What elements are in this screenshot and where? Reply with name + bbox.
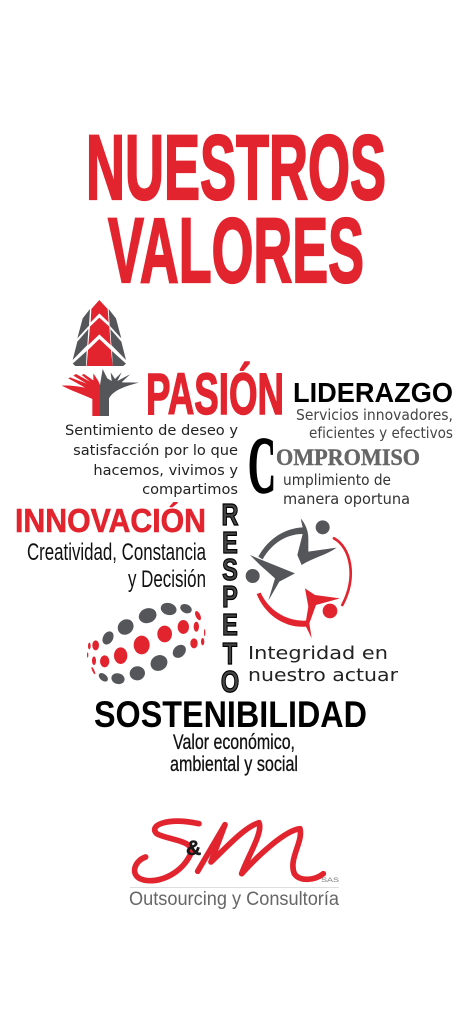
heading: respeto vertical: O xyxy=(221,664,239,699)
heading: compromiso xyxy=(248,422,420,510)
text: respeto description xyxy=(248,643,399,686)
text: pasión description xyxy=(65,422,238,498)
text: pasión description: satisfacción por lo que xyxy=(73,442,238,459)
logo ampersand: & xyxy=(186,837,201,860)
text: pasión description: Sentimiento de deseo y xyxy=(65,422,238,439)
text: respeto description: nuestro actuar xyxy=(248,665,399,686)
text: innovación description: Creatividad, Constancia xyxy=(27,539,206,566)
text: liderazgo description: eficientes y efectivos xyxy=(309,424,453,442)
logo tagline: Outsourcing y Consultoría xyxy=(129,889,339,910)
logo SAS: SAS xyxy=(321,877,340,884)
heading: pasión: PASIÓN xyxy=(146,362,284,427)
logo: S&M xyxy=(129,821,340,910)
text: innovación description xyxy=(27,539,206,593)
heading: respeto vertical: R xyxy=(221,497,239,532)
text: sostenibilidad description: ambiental y social xyxy=(170,753,298,776)
heading: respeto vertical: E xyxy=(222,525,238,560)
text: liderazgo description xyxy=(296,406,453,442)
text: compromiso description xyxy=(283,471,410,508)
text: sostenibilidad description: Valor económico, xyxy=(173,731,295,754)
text: liderazgo description: Servicios innovadores, xyxy=(296,406,453,424)
text: compromiso description: umplimiento de xyxy=(283,471,391,489)
heading: liderazgo: LIDERAZGO xyxy=(293,377,453,408)
text: pasión description: hacemos, vivimos y xyxy=(93,462,238,479)
heading: compromiso: C xyxy=(248,422,276,510)
heading: respeto vertical: T xyxy=(223,636,238,671)
text: compromiso description: manera oportuna xyxy=(283,490,410,508)
icon: dotted sphere xyxy=(87,601,205,686)
heading: respeto vertical: E xyxy=(222,607,238,642)
text: pasión description: compartimos xyxy=(142,481,238,498)
heading: innovación: INNOVACIÓN xyxy=(15,502,206,539)
icon: three figures xyxy=(246,518,351,638)
title xyxy=(86,117,386,302)
text: respeto description: Integridad en xyxy=(248,643,388,664)
heading: sostenibilidad: SOSTENIBILIDAD xyxy=(94,694,367,735)
heading: respeto vertical xyxy=(221,497,239,699)
text: innovación description: y Decisión xyxy=(128,566,206,593)
heading: compromiso: OMPROMISO xyxy=(276,445,420,470)
heading: respeto vertical: S xyxy=(222,552,238,587)
text: sostenibilidad description xyxy=(170,731,298,776)
heading: respeto vertical: P xyxy=(222,579,238,614)
icon: tower and hands xyxy=(62,300,139,416)
